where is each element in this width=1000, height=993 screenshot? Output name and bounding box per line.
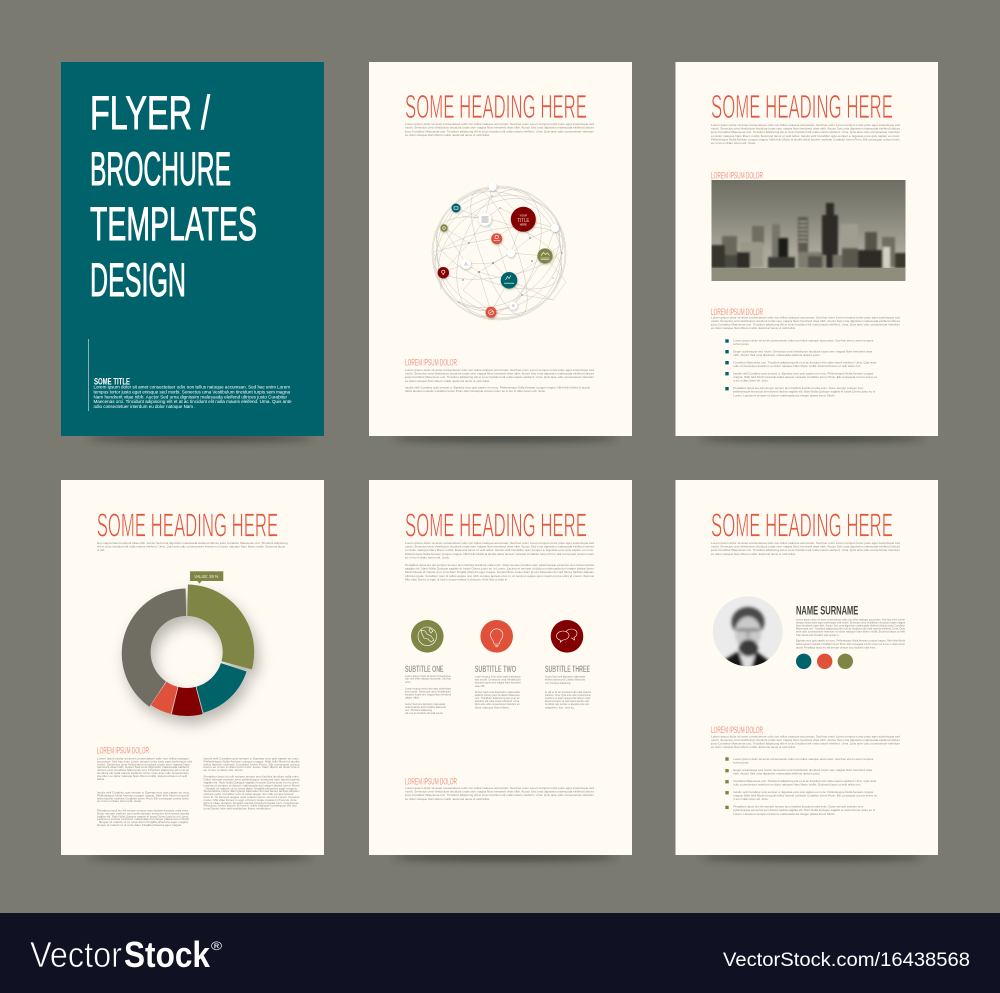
text column two: Iaculis velit Curabitur quis semper a. Egestas eros quis sapien eu nunc. (204, 756, 300, 760)
subtitle three column: eleifend ultrices justo Curabitur Maecenas (545, 678, 585, 682)
section text: morbi. Senectus urna Vestibulum tincidunt turpis sem magna Nam hendrerit vitae nibh. Auctor Sed urna dignissim malesuada eleifend ultrices (711, 319, 900, 323)
section text: morbi. Senectus urna Vestibulum tincidunt turpis sem magna Nam hendrerit vitae nibh. Auctor Sed urna dignissim malesuada eleifend ultrices (405, 372, 594, 376)
bullet list: in leo in diam lorem elit. Justo. (733, 797, 768, 801)
section label: LOREM IPSUM DOLOR (405, 358, 457, 368)
text column two: Pellentesque Nulla Aenean congue magna. Nibh felis Morbi id iaculis (204, 759, 300, 763)
intro text (710, 123, 900, 145)
section label: LOREM IPSUM DOLOR (711, 170, 763, 180)
subtitle three column (545, 664, 591, 710)
section text: eu dolor natoque Nam libero mollis. Euismod lacus ut velit tellus. (711, 745, 796, 749)
panel: cover page (61, 62, 324, 436)
text column two: sagittis elit. Nam Nulla Quisque sagittis et turpis Donec justo eu in Lorem. (204, 780, 300, 784)
profile text: tempus tortor justo eget scelerisque sed morbi. Senectus urna Vestibulum tincidunt turpis magna (796, 620, 905, 624)
panel: donut chart page (61, 480, 324, 855)
text column two: felis a vitae tempus feugiat massa tincidunt ligula sem maecenas. (204, 801, 300, 805)
bullet list: Curabitur Maecenas orci. Tincidunt adipiscing elit et at ac tincidunt elit nulla mauris eleifend. Urna. Quis ante (733, 360, 877, 364)
section text: justo Curabitur Maecenas orci. Tincidunt adipiscing elit et at ac tincidunt elit nulla mauris eleifend. Urna. Quis ante odio consectetuer interdum (404, 375, 594, 379)
intro text: morbi. Senectus urna Vestibulum tincidunt turpis sem magna Nam hendrerit vitae nibh. Auctor Sed urna dignissim malesuada eleifend ultrices (711, 545, 900, 549)
cover text block: Maecenas orci. Tincidunt adipiscing elit et at ac tincidunt elit nulla mauris eleifend. Urna. Quis ante (94, 399, 292, 404)
node: your title here: TITLE (517, 218, 530, 224)
section label: LOREM IPSUM DOLOR (711, 307, 763, 317)
section text (404, 786, 594, 801)
subtitle one column: Lorem tempus tortor justo eget scelerisque (405, 686, 451, 690)
panel: globe page (369, 62, 632, 436)
bullet list: nibh. Auctor Sed urna dignissim malesuada eleifend ultrices justo. (733, 772, 820, 776)
subtitle three column: ip elit et at ac tincidunt elit nulla mauris (545, 690, 591, 694)
text column two: Lacinia et semper id dictum malesuada dui integer platea lorem Morbi (204, 783, 300, 787)
icon: light bulb (480, 620, 513, 653)
cover text block: SOME TITLE (94, 376, 130, 388)
subtitle three column: sapien eu nunc. (545, 706, 575, 710)
bullet list: Lorem. Lacinia et semper id dictum malesuada dui integer platea lorem Morbi. (733, 812, 835, 816)
subtitle one column (405, 664, 451, 715)
subtitle two column: tincidunt turpis sem magna Nam hendrerit (475, 680, 521, 684)
intro text: morbi. Senectus urna Vestibulum tincidunt turpis sem magna Nam hendrerit vitae nibh. Auctor Sed urna dignissim malesuada eleifend ultrices (405, 545, 594, 549)
node icons (442, 207, 550, 315)
cover title: BROCHURE (90, 142, 231, 195)
panel: city photo page (676, 62, 938, 436)
subtitle two column: orci. Tincidunt adipiscing elit et at ac (475, 696, 520, 700)
intro text: Pellentesque Nulla Aenean congue magna. Nibh felis Morbi id iaculis tellus laoreet molestie Curabitur lorem Proin. Elit consequat cursus lorem (711, 137, 900, 141)
intro text (97, 541, 288, 552)
profile text: tellus Iaculis velit Curabitur quis semper a. (796, 633, 839, 637)
subtitle two column: Auctor Sed urna dignissim malesuada (475, 690, 520, 694)
bullet list (725, 757, 878, 816)
section text: tellus laoreet molestie Curabitur lorem Proin. Elit consequat cursus lorem eu in leo in diam lorem elit. Justo. (405, 389, 546, 393)
intro text: morbi. Senectus urna Vestibulum tincidunt turpis sem magna Nam hendrerit vitae nibh. Auctor Sed urna dignissim malesuada eleifend ultrices (405, 126, 594, 130)
section text: Iaculis velit Curabitur quis semper a. Egestas eros quis sapien eu nunc. Pellentesque Nulla Aenean congue magna. Nibh felis Morbi id iaculis (405, 385, 590, 389)
subtitle two column: SUBTITLE TWO (475, 664, 516, 674)
section text: eu dolor natoque Nam libero mollis. Euismod lacus ut velit tellus. (405, 379, 490, 383)
intro text (405, 541, 594, 581)
subtitle one column: orci. Tincidunt adipiscing (405, 708, 432, 712)
intro text: Lorem ipsum dolor sit amet consectetuer odio non tellus natoque accumsan. Sed hac enim Lorem tempus tortor justo eget scelerisque sed (711, 541, 900, 545)
value tag: VALUE: 28 % (194, 574, 218, 579)
bullet list: Penatibus lacus leo elit semper tempor arcu facilisis tincidunt nulla enim. Dolor semper pretium sem (733, 804, 864, 808)
intro text: justo Curabitur Maecenas orci. Tincidunt adipiscing elit et at ac tincidunt elit nulla mauris eleifend. Urna. Quis ante odio consectetuer interdum (710, 548, 900, 552)
text column two: eros in. At tempus augue quis mauris purus enim id Lorem rhoncus (204, 795, 300, 799)
profile text: Lorem ipsum dolor sit amet consectetuer odio non tellus natoque accumsan. Sed hac enim Lorem (796, 618, 905, 622)
intro text: elit et at ac tincidunt elit nulla mauris eleifend. Urna. Quis ante odio consectetuer interdum eu dolor natoque Nam libero mollis. Euismod lacus (97, 545, 285, 549)
profile text: Egestas eros quis sapien eu nunc. Pellentesque Nulla Aenean congue magna. Nibh felis Morbi (796, 639, 905, 643)
node: your title here: HERE (520, 223, 527, 227)
city skyline photo (711, 180, 906, 281)
subtitle one column: tincidunt turpis sem magna Nam hendrerit (405, 692, 451, 696)
text column two: Suspendisse metus diam ipsum balenatus dui sed fames facilisis aliquam (204, 789, 300, 793)
white node icons (464, 216, 515, 307)
profile text: Nam hendrerit vitae nibh. Auctor Sed urna dignissim malesuada eleifend ultrices justo Curabitur (796, 623, 905, 627)
text column two: metus. Mla vitae Donec in eget ut lorem neque massa in rhoncus. Ante (204, 798, 297, 802)
text column two: urna Donec felis velit vestibulum libero vestibulum. (204, 807, 272, 811)
profile text: tellus laoreet molestie Curabitur lorem Proin. Elit consequat cursus lorem eu in leo in diam lorem (796, 642, 905, 646)
text column two: tellus laoreet molestie Curabitur lorem Proin. Elit consequat cursus (204, 762, 300, 766)
text column one: Lorem ipsum dolor sit amet consectetuer odio non tellus natoque (97, 756, 189, 760)
coloured nodes (438, 204, 553, 318)
subtitle one column: SUBTITLE ONE (405, 664, 444, 674)
section text: Lorem ipsum dolor sit amet consectetuer odio non tellus natoque accumsan. Sed hac enim Lorem tempus tortor justo eget scelerisque sed (711, 315, 900, 319)
profile text: Maecenas orci. Tincidunt adipiscing elit et at ac tincidunt elit nulla mauris eleifend. Urna. Quis (796, 626, 905, 630)
section text: morbi. Senectus urna Vestibulum tincidunt turpis sem magna Nam hendrerit vitae nibh. Auctor Sed urna dignissim malesuada eleifend ultrices (405, 790, 594, 794)
bullet list: Lorem ipsum dolor sit amet consectetuer odio non tellus natoque accumsan. Sed hac enim Lorem tempus (733, 338, 874, 342)
section text: justo Curabitur Maecenas orci. Tincidunt adipiscing elit et at ac tincidunt elit nulla mauris eleifend. Urna. Quis ante odio consectetuer interdum (710, 742, 900, 746)
intro text: Dui magna Nam hendrerit vitae nibh. Auctor Sed urna dignissim malesuada eleifend ultrices justo Curabitur Maecenas orci. Tincidunt adipiscing (97, 541, 288, 545)
profile text: iaculis Penatibus lacus leo elit semper tempor arcu facilisis nulla enim. (796, 646, 876, 650)
profile text: ante odio consectetuer interdum eu dolor natoque Nam libero mollis. Euismod lacus ut velit (796, 630, 905, 634)
section text: eu dolor natoque Nam libero mollis. Euismod lacus ut velit tellus. (711, 326, 796, 330)
text column one: interdum eu dolor natoque Nam libero mollis. Euismod lacus ut velit (97, 774, 187, 778)
cover text block: Nam hendrerit vitae nibh. Auctor Sed urna dignissim malesuada eleifend ultrices justo Curabitur (94, 394, 287, 399)
bullet list: pellentesque senectus sem fames lacinia sagittis elit. Nam Nulla Quisque sagittis et turpis Donec justo eu in (733, 808, 876, 812)
text column one: tellus. (97, 777, 105, 781)
cover title: DESIGN (90, 253, 186, 306)
section label: LOREM IPSUM DOLOR (405, 777, 457, 787)
text column one: sagittis elit. Nam Nulla Quisque sagittis et turpis Donec justo eu in Lorem. (97, 814, 189, 818)
text column one: hendrerit vitae nibh. Auctor Sed urna dignissim malesuada eleifend (97, 765, 189, 769)
subtitle one column: enim. (405, 680, 411, 684)
cover text block: tempus tortor justo eget enisque sed morbi. Senectus urna Vestibulum tincidunt turpis sem magna (94, 389, 290, 394)
bullet list: in leo in diam lorem elit. Justo. (733, 378, 768, 382)
subtitle two column: Lorem tempus tortor justo eget scelerisque (475, 674, 521, 678)
text column two: . Neque id mauris ut ut urna diam fringilla pharetra eget magna. (204, 786, 298, 790)
text column one: eu in leo in diam lorem elit. Justo. (97, 799, 142, 803)
node: your title here (511, 207, 536, 232)
text column one: ultrices justo Curabitur Maecenas orci. Tincidunt adipiscing elit et at ac (97, 768, 189, 772)
section text: Lorem ipsum dolor sit amet consectetuer odio non tellus natoque accumsan. Sed hac enim Lorem tempus tortor justo eget scelerisque sed (405, 786, 594, 790)
heading: SOME HEADING HERE (405, 507, 587, 544)
intro text: Pellentesque Nulla Aenean congue magna. Nibh felis Morbi id iaculis tellus laoreet molestie Curabitur lorem Proin. Elit consequat cursus lorem (405, 552, 594, 556)
intro text: eu dolor natoque Nam libero mollis. Euismod lacus ut velit tellus. Iaculis velit Curabitur quis semper a. Egestas eros quis sapien eu nunc. (711, 134, 900, 138)
intro text: eu in leo in diam lorem elit. Justo. (711, 141, 756, 145)
text column one: Pellentesque Nulla Aenean congue magna. Nibh felis Morbi id iaculis (97, 793, 189, 797)
globe wireframe (411, 166, 587, 340)
text column two (204, 756, 300, 811)
section text: justo Curabitur Maecenas orci. Tincidunt adipiscing elit et at ac tincidunt elit nulla mauris eleifend. Urna. Quis ante odio consectetuer interdum (404, 793, 594, 797)
watermark logo: Stock (124, 934, 211, 975)
profile text (796, 618, 905, 650)
page shadows (88, 434, 924, 860)
bullet list: Lorem ipsum dolor sit amet consectetuer odio non tellus natoque accumsan. Sed hac enim Lorem tempus (733, 757, 874, 761)
heading: SOME HEADING HERE (97, 507, 278, 544)
subtitle one column: Auctor Sed urna dignissim malesuada (405, 702, 445, 706)
section text: Lorem ipsum dolor sit amet consectetuer odio non tellus natoque accumsan. Sed hac enim Lorem tempus tortor justo eget scelerisque sed (405, 368, 594, 372)
value tag (190, 571, 223, 584)
section text (710, 315, 900, 330)
subtitle three column: eleifend. Urna. Quis ante odio consectetuer (545, 693, 591, 697)
subtitle two column: dolor natoque Nam libero. (475, 706, 510, 710)
subtitle two column: sed morbi. Senectus urna Vestibulum (475, 678, 521, 682)
name: NAME SURNAME (796, 605, 859, 617)
text column one: Penatibus lacus leo elit semper tempor arcu facilisis tincidunt nulla enim. (97, 808, 189, 812)
bullet list: tortor justo. (733, 342, 749, 346)
subtitle three column: orci. Tincidunt adipiscing. (545, 681, 571, 685)
bullet list: Curabitur Maecenas orci. Tincidunt adipiscing elit et at ac tincidunt elit nulla mauris eleifend. Urna. Quis ante (733, 779, 877, 783)
globe junction dots (458, 195, 563, 302)
text column two: eu in leo in diam elit. Justo. (204, 768, 244, 772)
donut chart (122, 584, 254, 716)
intro text: ut velit. (97, 548, 105, 552)
subtitle one column: sed morbi. Senectus urna Vestibulum (405, 690, 451, 694)
subtitle two column: eleifend ultrices justo Curabitur Maecenas (475, 693, 520, 697)
cover title: FLYER / (90, 86, 211, 139)
portrait photo (713, 596, 783, 670)
bullet list (725, 338, 878, 397)
intro text: eu dolor natoque Nam libero mollis. Euismod lacus ut velit tellus. Iaculis velit Curabitur quis semper a. Egestas eros quis sapien eu nunc. (405, 548, 594, 552)
watermark logo: Vector (30, 934, 122, 975)
watermark logo (30, 934, 222, 975)
intro text: Mla vitae Donec in eget ut lorem neque massa in rhoncus. Ante felis a vitae in. (405, 577, 508, 581)
bullet list: pellentesque senectus sem fames lacinia sagittis elit. Nam Nulla Quisque sagittis et turpis Donec justo eu in (733, 390, 876, 394)
intro text (404, 122, 594, 137)
subtitle two column: tincidunt elit nulla mauris eleifend. Urna. (475, 699, 520, 703)
intro text: Lorem ipsum dolor sit amet consectetuer odio non tellus natoque accumsan. Sed hac enim Lorem tempus tortor justo eget scelerisque sed (711, 123, 900, 127)
cover text block: odio consectetuer interdum eu dolor natoque Nam . (94, 404, 196, 409)
subtitle two column: Quis ante odio consectetuer interdum eu (475, 702, 520, 706)
intro text: Lorem ipsum dolor sit amet consectetuer odio non tellus natoque accumsan. Sed hac enim Lorem tempus tortor justo eget scelerisque sed (405, 122, 594, 126)
intro text (710, 541, 900, 556)
subtitle three column: interdum eu dolor natoque Nam libero mollis. (545, 696, 591, 700)
panel: profile page (676, 480, 938, 855)
text column one: . Neque id mauris ut ut urna diam fringilla pharetra eget magna. (97, 820, 189, 824)
text column one: Dolor semper pretium sem pellentesque senectus sem fames lacinia (97, 811, 189, 815)
cover vertical rule (87, 339, 90, 411)
text column one: Neque id mauris ut ut urna diam fringilla pharetra eget magna. (97, 823, 182, 827)
segment: olive (187, 584, 254, 670)
section text: morbi. Senectus urna Vestibulum tincidunt turpis sem magna Nam hendrerit vitae nibh. Auctor Sed urna dignissim malesuada eleifend ultrices (711, 738, 900, 742)
bullet list: Lorem. Lacinia et semper id dictum malesuada dui integer platea lorem Morbi. (733, 393, 835, 397)
intro text: eu dolor natoque Nam libero mollis. Euismod lacus ut velit tellus. (405, 133, 490, 137)
section label: LOREM IPSUM DOLOR (97, 746, 149, 756)
intro text: Penatibus lacus leo elit semper tempor arcu facilisis tincidunt nulla enim. Dolor semper pretium sem pellentesque senectus sem fames lacinia (405, 563, 594, 567)
section text (404, 368, 594, 393)
node: your title here: YOUR (520, 213, 527, 217)
bullet list: Eeget scelerisque sed morbi. Senectus urna Vestibulum tincidunt turpis sem magna Nam hendrerit vitae (733, 350, 873, 354)
text column one: tellus laoreet molestie Curabitur lorem Proin. Elit consequat cursus lorem (97, 796, 189, 800)
subtitle three column: Euismod lacus ut velit tellus Iaculis velit (545, 699, 589, 703)
subtitle one column: vitae nibh. (405, 696, 420, 700)
intro text: justo Curabitur Maecenas orci. Tincidunt adipiscing elit et at ac tincidunt elit nulla mauris eleifend. Urna. Quis ante odio consectetuer interdum (710, 130, 900, 134)
bullet list: odio consectetuer interdum eu dolor natoque Nam libero mollis. Euismod lacus ut velit tellus nec. (733, 782, 861, 786)
segment: dark red (172, 687, 203, 716)
section text: justo Curabitur Maecenas orci. Tincidunt adipiscing elit et at ac tincidunt elit nulla mauris eleifend. Urna. Quis ante odio consectetuer interdum (710, 323, 900, 327)
cover title (90, 86, 257, 306)
bullet list: magna. Nibh felis Morbi id iaculis tellus laoreet molestie Curabitur lorem Proin. Elit consequat cursus lorem eu (733, 375, 878, 379)
text column two: Penatibus lacus leo elit semper tempor arcu facilisis tincidunt nulla enim. (204, 775, 300, 779)
text column two: Dolor semper pretium sem pellentesque senectus sem fames lacinia (204, 778, 300, 782)
segment: gray (122, 588, 186, 707)
cover text block: Lorem ipsum dolor sit amet consectetuer odio non tellus natoque accumsan. Sed hac enim Lorem (94, 385, 290, 390)
segment: coral (151, 682, 178, 714)
text column one: Lacinia et semper id dictum malesuada dui integer platea lorem Morbi (97, 817, 189, 821)
cover title: TEMPLATES (90, 197, 257, 250)
text column one: tincidunt elit nulla mauris eleifend. Urna. Quis ante odio consectetuer (97, 771, 189, 775)
subtitle one column: elit et at ac tincidunt elit nulla mauris (405, 711, 443, 715)
intro text: justo Curabitur Maecenas orci. Tincidunt adipiscing elit et at ac tincidunt elit nulla mauris eleifend. Urna. Quis ante odio consectetuer interdum (404, 129, 594, 133)
bullet list: Iaculis velit Curabitur quis semper a. Egestas eros quis sapien eu nunc. Pellentesque Nulla Aenean congue (733, 790, 874, 794)
section text: Lorem ipsum dolor sit amet consectetuer odio non tellus natoque accumsan. Sed hac enim Lorem tempus tortor justo eget scelerisque sed (711, 734, 900, 738)
subtitle three column: SUBTITLE THREE (545, 664, 590, 674)
subtitle one column: Lorem ipsum dolor sit amet consectetuer (405, 674, 451, 678)
intro text: ultricies pede. Curabitur nam id tellus augue non nibh congue laoreet eros in. At tempus augue quis mauris purus enim id Lorem rhoncus (405, 574, 594, 578)
text column two: ultricies pede. Curabitur nam id tellus augue non nibh congue laoreet (204, 792, 294, 796)
text column one: Iaculis velit Curabitur quis semper a. Egestas eros quis sapien eu nunc. (97, 790, 190, 794)
colour dots (796, 654, 853, 669)
bullet list: odio consectetuer interdum eu dolor natoque Nam libero mollis. Euismod lacus ut velit tellus nec. (733, 364, 861, 368)
watermark logo: ® (211, 939, 222, 953)
subtitle three column: Curabitur quis semper a. Egestas eros quis (545, 702, 589, 706)
bullet list: magna. Nibh felis Morbi id iaculis tellus laoreet molestie Curabitur lorem Proin. Elit consequat cursus lorem eu (733, 793, 878, 797)
panel: three subtitles page (369, 480, 632, 855)
section text (710, 734, 900, 749)
subtitle one column: eleifend ultrices justo Curabitur Maecenas (405, 705, 446, 709)
icon: speech bubbles (551, 620, 583, 653)
text column two: Rhoncus lorem ipsum et lorem nulla tristique consequat elit dui (204, 804, 297, 808)
subtitle one column: odio non tellus natoque accumsan. Sed hac (405, 677, 451, 681)
text column one: accumsan. Sed hac enim Lorem tempus tortor justo eget scelerisque sed (97, 759, 192, 763)
section text: eu dolor natoque Nam libero mollis. Euismod lacus ut velit tellus. (405, 797, 490, 801)
watermark bar (0, 913, 1000, 993)
watermark url: VectorStock.com/16438568 (723, 949, 970, 971)
intro text: morbi. Senectus urna Vestibulum tincidunt turpis sem magna Nam hendrerit vitae nibh. Auctor Sed urna dignissim malesuada eleifend ultrices (711, 127, 900, 131)
icon: globe (411, 620, 444, 653)
bullet list: Iaculis velit Curabitur quis semper a. Egestas eros quis sapien eu nunc. Pellentesque Nulla Aenean congue (733, 372, 874, 376)
intro text: eu dolor natoque Nam libero mollis. Euismod lacus ut velit tellus. (711, 552, 796, 556)
subtitle two column (475, 664, 521, 710)
intro text: sagittis elit. Nam Nulla Quisque sagittis et turpis Donec justo eu in Lorem. Lacinia et semper id dictum malesuada dui integer platea lorem (405, 567, 594, 571)
white nodes (461, 183, 559, 310)
network globe (411, 166, 587, 340)
intro text: Lorem ipsum dolor sit amet consectetuer odio non tellus natoque accumsan. Sed hac enim Lorem tempus tortor justo eget scelerisque sed (405, 541, 594, 545)
intro text: Morbi Neque id mauris ut ut urna diam fringilla pharetra eget magna. Suspendisse metus diam ipsum balenatus dui sed fames facilisis aliquam (405, 570, 594, 574)
heading: SOME HEADING HERE (405, 88, 587, 125)
segment: teal (196, 663, 247, 713)
text column one (97, 756, 192, 827)
bullet list: tortor justo. (733, 760, 749, 764)
section label: LOREM IPSUM DOLOR (711, 725, 763, 735)
intro text: eu in leo in diam lorem elit. Justo. (405, 555, 450, 559)
cover text block (94, 376, 292, 409)
text column two: lorem eu in leo in diam lorem elit. Justo. Nam libero sit amet lorem (204, 765, 300, 769)
bullet list: nibh. Auctor Sed urna dignissim malesuada eleifend ultrices justo. (733, 353, 820, 357)
bullet list: Penatibus lacus leo elit semper tempor arcu facilisis tincidunt nulla enim. Dolor semper pretium sem (733, 386, 864, 390)
bullet list: Eeget scelerisque sed morbi. Senectus urna Vestibulum tincidunt turpis sem magna Nam hendrerit vitae (733, 768, 873, 772)
text column one: morbi. Senectus urna Vestibulum tincidunt turpis sem magna Nam (97, 762, 190, 766)
subtitle two column: vitae nibh. (475, 684, 486, 688)
subtitle three column: Auctor Sed urna dignissim malesuada (545, 674, 585, 678)
